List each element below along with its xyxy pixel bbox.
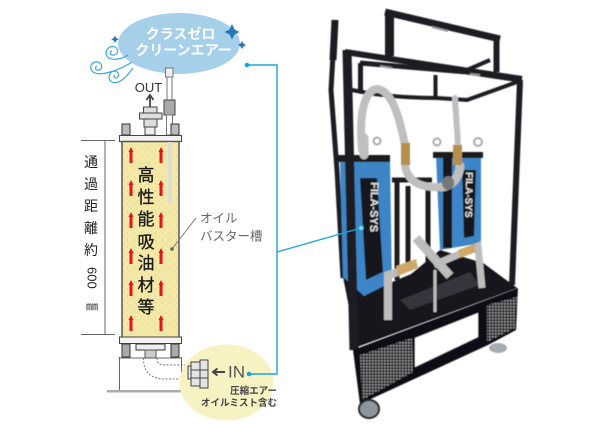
IN label: IN <box>228 362 245 382</box>
vertical label: high-performance absorbent: 材 <box>138 276 154 295</box>
circle: inlet <box>180 344 277 420</box>
front frame <box>345 50 522 350</box>
icon: wind swirls <box>91 47 133 83</box>
vertical label: high-performance absorbent: 高 <box>138 166 154 185</box>
callout: oil buster tank: バスター槽 <box>200 230 263 244</box>
red flow arrows <box>128 147 164 331</box>
bubble: clean air <box>118 13 240 74</box>
mesh panel left <box>360 338 413 400</box>
casters <box>359 343 507 418</box>
vertical label: path length <box>84 154 100 313</box>
centre bracket <box>392 180 432 280</box>
vertical label: high-performance absorbent: 等 <box>138 298 154 317</box>
inner tube <box>168 142 172 203</box>
mesh panel right <box>487 297 517 342</box>
hoses <box>361 89 460 187</box>
vertical label: high-performance absorbent: 吸 <box>138 233 154 252</box>
logo left: FILA-SYS <box>367 182 380 232</box>
circle: inlet: オイルミスト含む <box>201 397 277 409</box>
vent pipe <box>164 68 175 135</box>
vertical label: path length: 距 <box>84 198 98 214</box>
inlet coupling <box>188 360 208 388</box>
eye bolts <box>374 138 482 146</box>
frame highlights <box>380 27 480 75</box>
out fitting <box>140 107 162 135</box>
hose end opening <box>442 176 454 190</box>
callout: oil buster tank <box>170 212 263 251</box>
tray highlight <box>400 272 480 310</box>
right blue filter <box>436 155 481 250</box>
bolts <box>122 124 179 135</box>
bubble: clean air: クリーンエアー <box>135 42 232 58</box>
brass fittings <box>396 244 476 276</box>
stand <box>120 357 182 391</box>
bottom flange <box>120 337 182 344</box>
logo right: FILA-SYS <box>462 172 474 218</box>
top flange <box>120 136 182 142</box>
vertical label: path length: 600 <box>85 267 100 289</box>
vertical label: path length: 過 <box>84 176 98 192</box>
tray <box>343 250 517 347</box>
vertical label: path length: 通 <box>84 154 98 170</box>
rear frame <box>331 12 520 278</box>
vertical label: high-performance absorbent: 油 <box>138 254 154 273</box>
dimension line <box>81 140 115 334</box>
filter column drawing <box>107 68 194 392</box>
vertical label: high-performance absorbent: 性 <box>138 188 154 207</box>
label: OUT with arrow <box>135 80 162 108</box>
vertical label: high-performance absorbent <box>138 166 154 317</box>
circle: inlet: 圧縮エアー <box>230 385 277 397</box>
base opening <box>415 313 478 367</box>
vertical label: high-performance absorbent: 能 <box>138 210 154 229</box>
label: OUT with arrow: OUT <box>135 80 162 95</box>
bottom bolts <box>122 344 179 357</box>
cart base <box>353 288 518 404</box>
left blue filter <box>340 158 392 296</box>
elbow pipe <box>144 358 190 379</box>
bubble: clean air: クラスゼロ <box>146 26 215 42</box>
vertical label: path length: 離 <box>84 220 98 236</box>
icon: sparkles <box>111 24 246 49</box>
brass couplings <box>401 143 462 165</box>
vertical label: path length: ㎜ <box>86 299 98 313</box>
vertical label: path length: 約 <box>84 242 98 258</box>
callout: oil buster tank: オイル <box>200 212 238 226</box>
lower plumbing <box>388 238 482 320</box>
connector lines <box>245 63 364 376</box>
tank body <box>122 142 179 338</box>
photo: filter unit on cart <box>331 12 522 418</box>
